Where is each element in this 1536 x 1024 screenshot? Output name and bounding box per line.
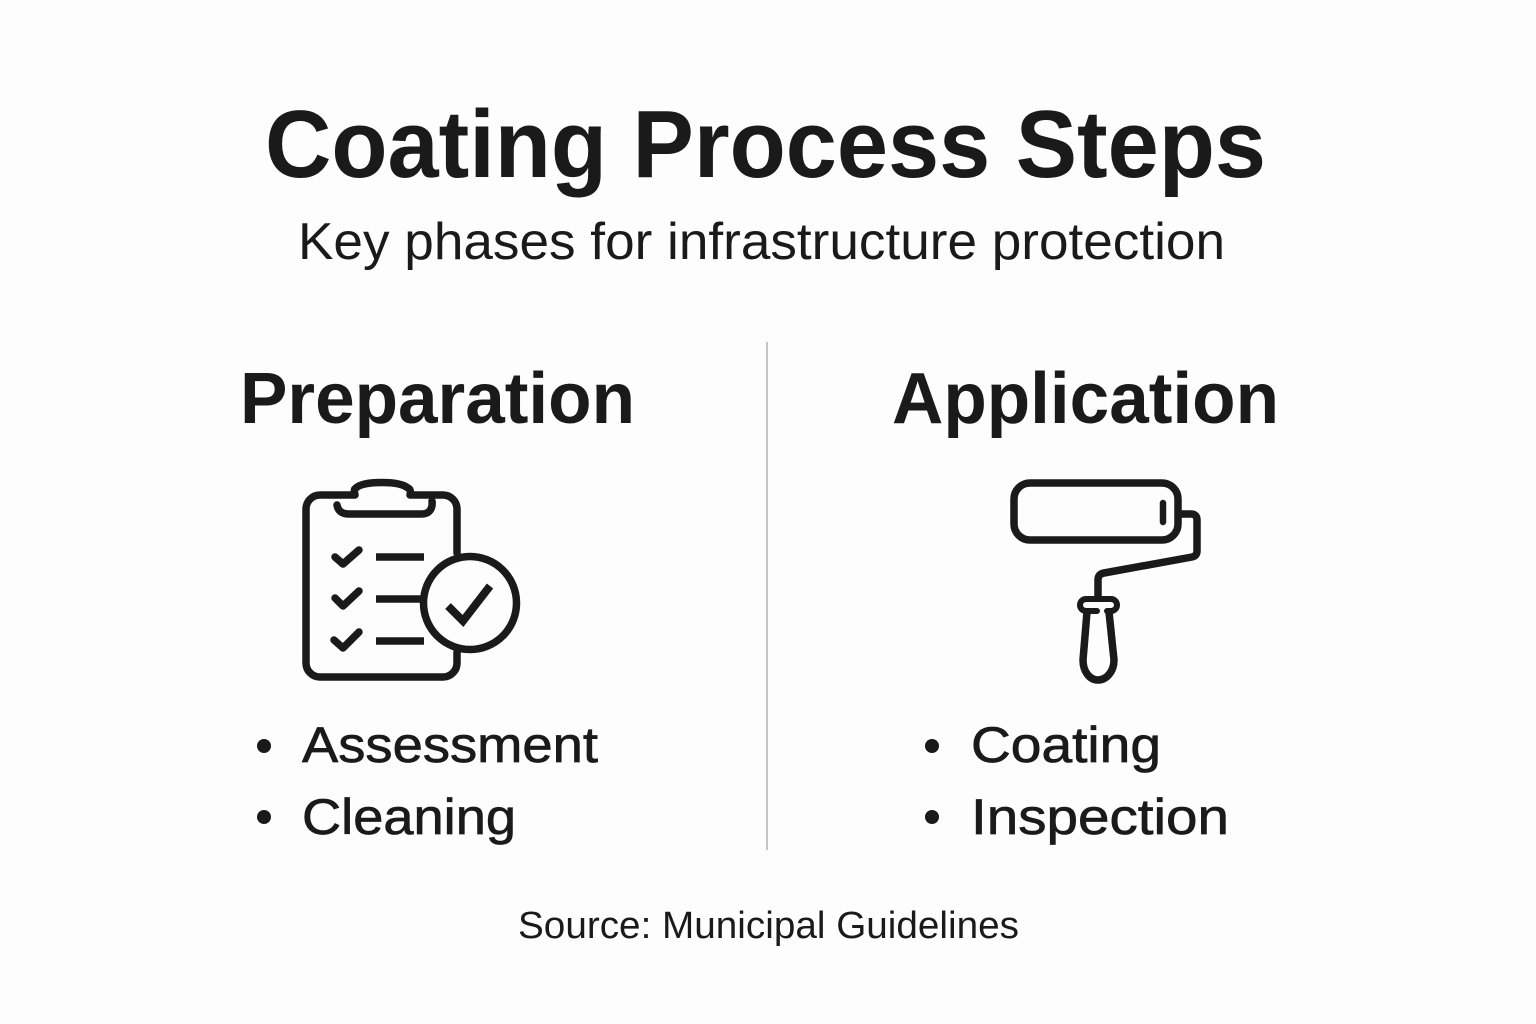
list: preparation steps: [257, 717, 598, 845]
list: application steps: Inspection: [971, 789, 1229, 845]
icon: paint roller: [1014, 483, 1197, 680]
list: preparation steps: Cleaning: [302, 789, 516, 845]
source note: Source: Municipal Guidelines: [518, 905, 1019, 947]
list: preparation steps: Assessment: [302, 717, 598, 773]
heading: application: Application: [892, 359, 1279, 439]
list: application steps: [925, 717, 1229, 845]
title: Coating Process Steps: [265, 91, 1266, 198]
list: application steps: Coating: [971, 717, 1161, 773]
heading: preparation: Preparation: [240, 359, 635, 439]
panel: preparation: [240, 359, 635, 845]
icon: clipboard checklist: [306, 482, 516, 677]
subtitle: Key phases for infrastructure protection: [298, 213, 1225, 271]
panel: application: [892, 359, 1279, 845]
